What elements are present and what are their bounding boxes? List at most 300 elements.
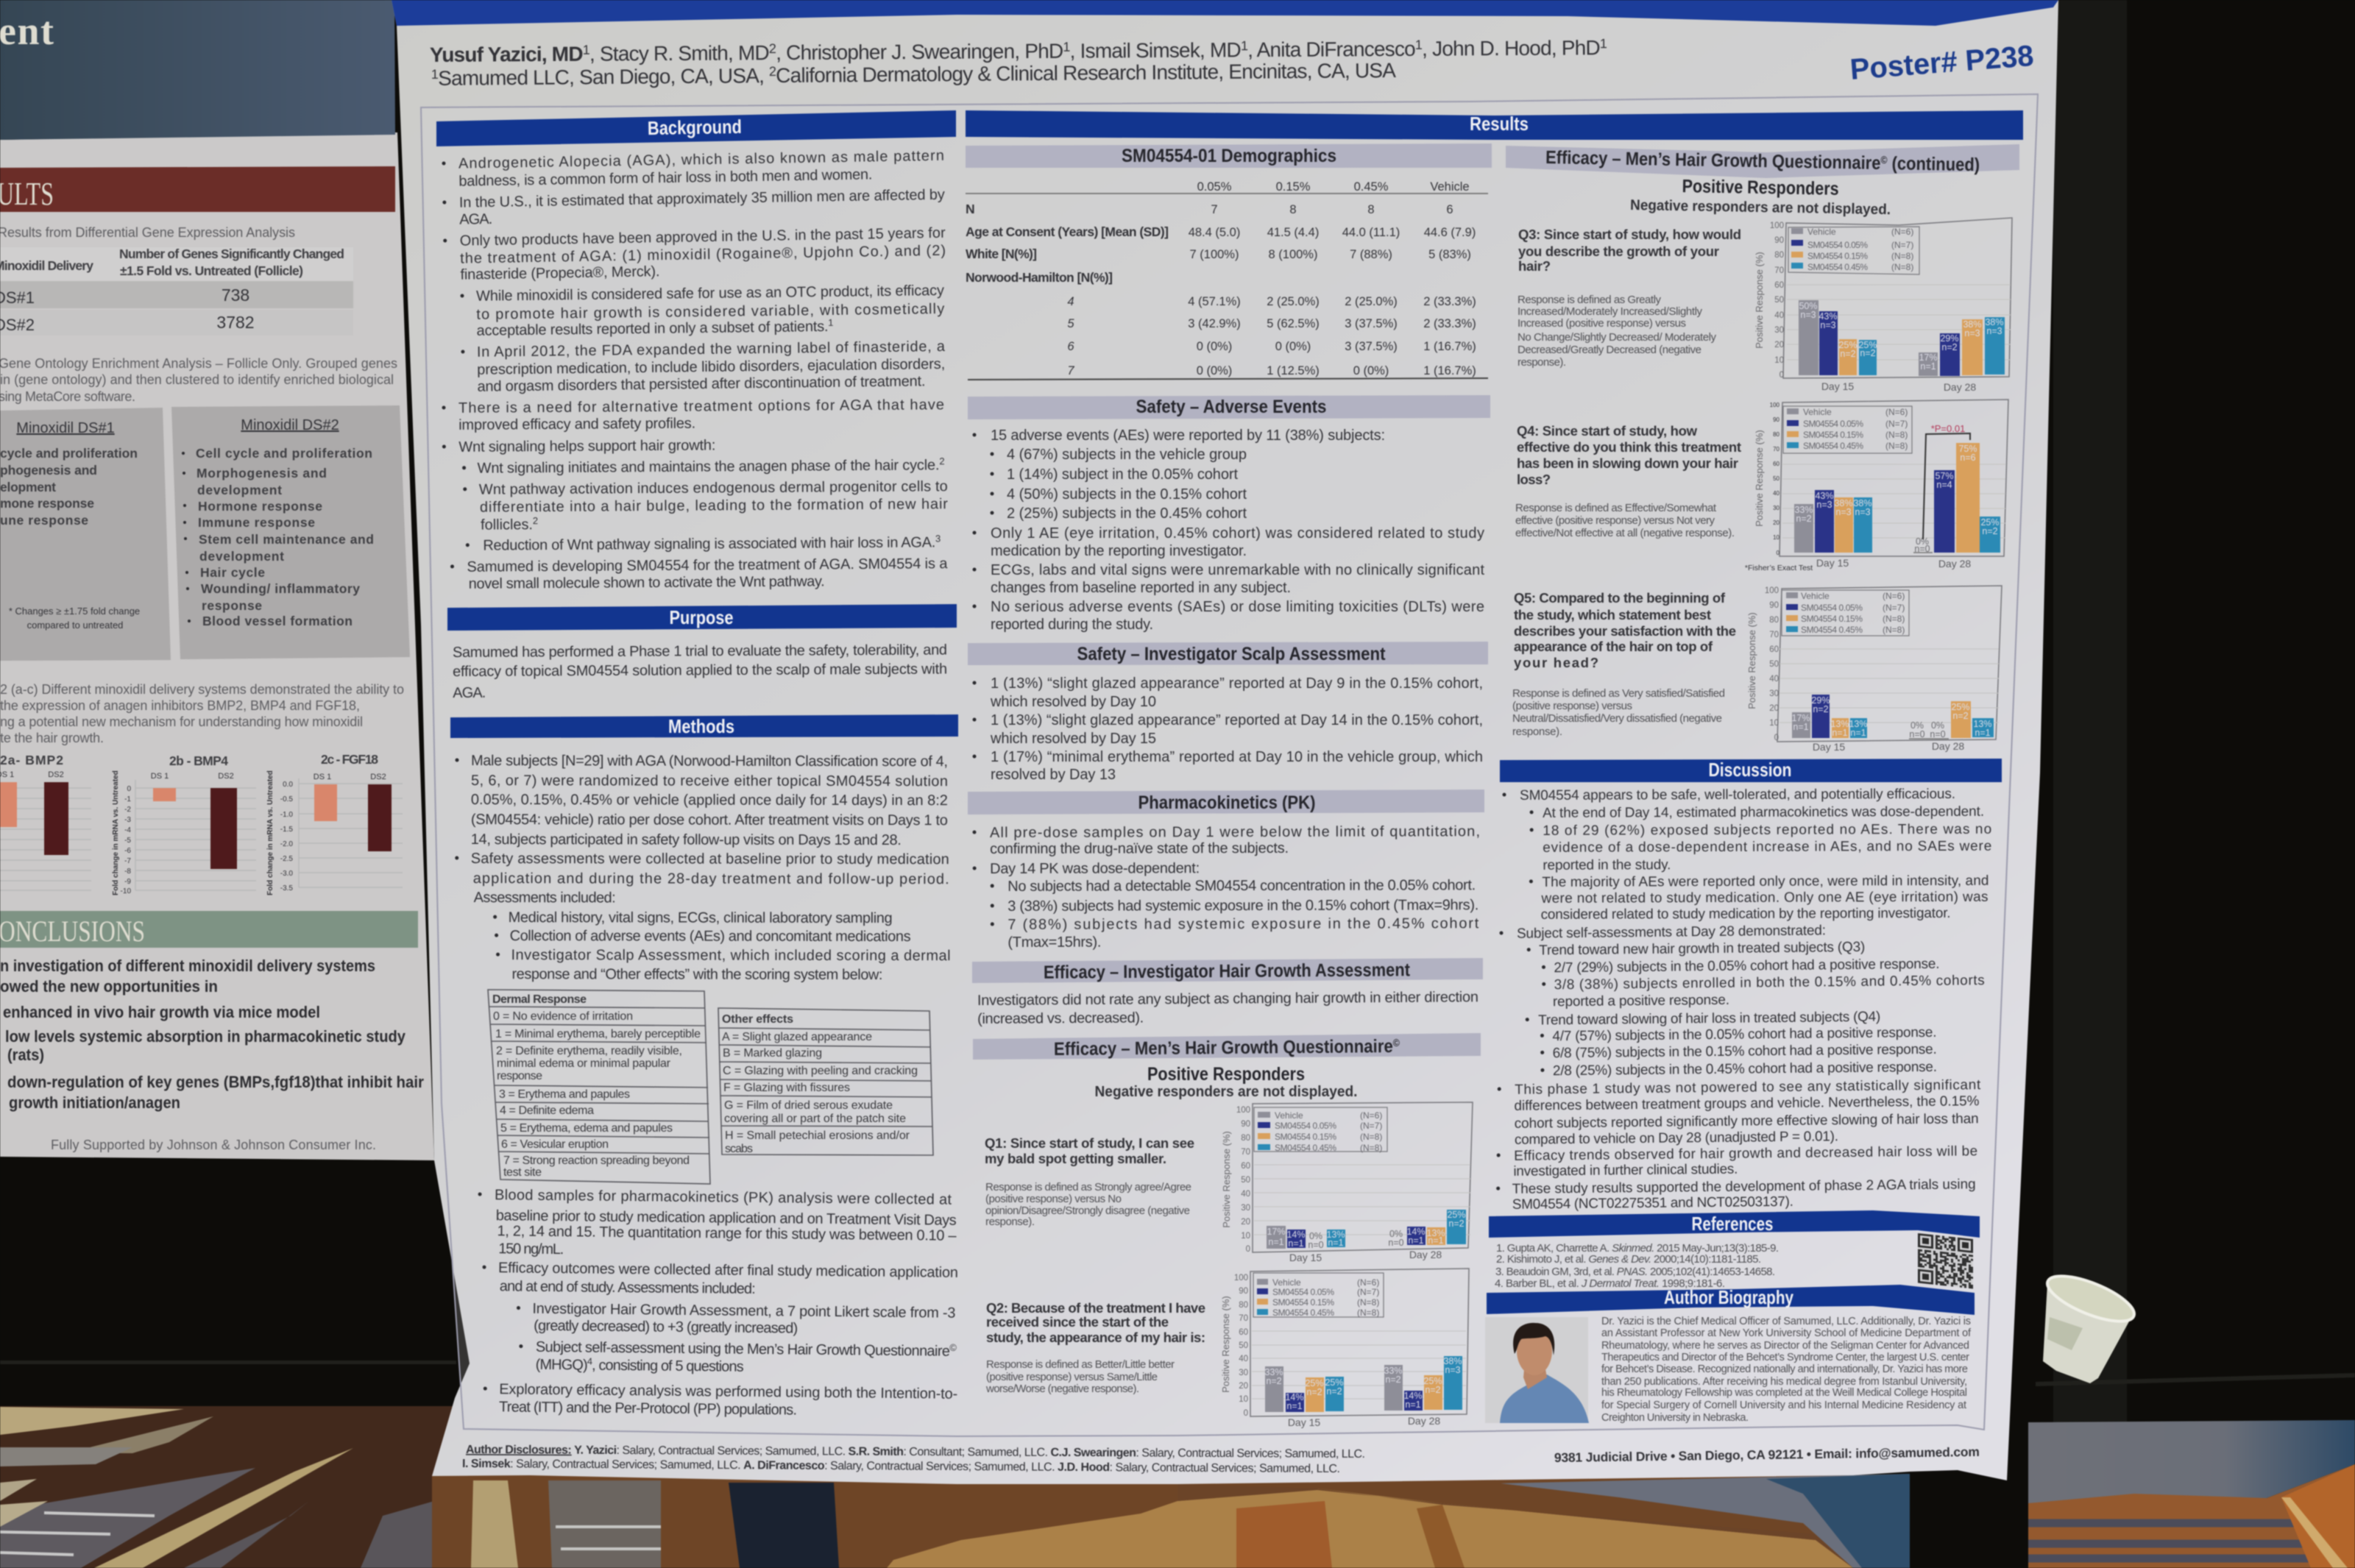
text: Background: While minoxidil is considered safe for use as an OTC product, its efficacy: [476, 283, 944, 305]
bar chart: 2c FGF18: -2.0: [280, 840, 293, 848]
table: demographics: 44.0 (11.1): [1342, 226, 1400, 239]
bar chart: Q5: n=0: [1909, 729, 1925, 739]
text: Background: finasteride (Propecia®, Merck).: [460, 263, 660, 283]
text: Background: the treatment of AGA: (1) minoxidil (Rogaine®, Upjohn Co.) and (2): [460, 243, 946, 267]
author list: 1: [1241, 38, 1248, 53]
text: Discussion: 6/8 (75%) subjects in the 0.15% cohort had a positive response.: [1553, 1042, 1937, 1061]
bar chart: Q4: 30: [1773, 505, 1780, 511]
bar chart: Q1: Positive Response (%): [1221, 1131, 1232, 1228]
text: Q1: Q1: Since start of study, I can see: [985, 1135, 1194, 1151]
text: Methods upper: Medical history, vital signs, ECGs, clinical laboratory sampling: [509, 909, 893, 926]
bar chart: Q5: n=2: [1813, 704, 1829, 714]
bar chart: 2c FGF18: DS2: [370, 773, 386, 781]
icon: QR code: [1918, 1233, 1973, 1289]
figure caption: [0, 682, 404, 745]
text: Q5: describes your satisfaction with the: [1514, 623, 1736, 639]
legend: (N=8): [1360, 1143, 1382, 1153]
bar chart: Q1: n=2: [1448, 1218, 1465, 1229]
bar chart: Q5: 13%: [1973, 719, 1992, 729]
affiliations: 2: [769, 64, 776, 79]
figure caption: te the hair growth.: [0, 731, 104, 745]
panel: Minoxidil DS#1: Minoxidil DS#1: [16, 420, 115, 436]
bar chart: Q4: 40: [1773, 490, 1780, 497]
bar chart: 2b BMP4: [112, 753, 256, 895]
text: Safety Investigator Scalp Assessment: resolved by Day 13: [991, 767, 1116, 783]
bar chart: Q4: 90: [1773, 416, 1780, 423]
bar chart: Q3: 70: [1774, 266, 1784, 275]
bar chart: Q2: 60: [1239, 1328, 1248, 1337]
text: Q2: (positive response) versus Same/Little: [986, 1371, 1158, 1383]
bar chart: 2c FGF18: 0.0: [283, 781, 293, 789]
text: Methods upper: Male subjects [N=29] with AGA (Norwood-Hamilton Classification score of 4,: [471, 753, 948, 770]
table: Dermal Response: 7 = Strong reaction spreading beyond: [503, 1154, 690, 1167]
panel: Minoxidil DS#2: response: [202, 598, 262, 613]
bar chart: Q4: 50: [1773, 475, 1780, 482]
text: Discussion: evidence of a dose-dependent increase in AEs, and no SAEs were: [1543, 839, 1991, 856]
heading: Efficacy continued: (continued): [1887, 153, 1980, 175]
legend: (N=6): [1885, 407, 1908, 417]
text: Safety Adverse Events: [974, 428, 1484, 633]
text: Methods lower: baseline prior to study medication application and on Treatment Visit Days: [496, 1207, 957, 1229]
text: Q5: (positive response) versus: [1512, 700, 1632, 712]
text: Safety Investigator Scalp Assessment: 1 (13%) “slight glazed appearance” reported at Day 9 in the 0.15% cohort,: [991, 675, 1483, 692]
table: demographics: [966, 180, 1488, 380]
bar chart: Q2: 14%: [1285, 1392, 1304, 1402]
text: Author Biography: an Assistant Professor at New York University School of Medicine Department of: [1601, 1327, 1972, 1339]
bar chart: 2c FGF18: -1.0: [280, 811, 293, 819]
text: Q5: appearance of the hair on top of: [1514, 639, 1713, 654]
table: demographics: 0 (0%): [1353, 364, 1389, 377]
bar chart: Q1: n=1: [1408, 1235, 1424, 1246]
bar chart: Q1: 13%: [1426, 1228, 1445, 1238]
table: Dermal Response: 6 = Vesicular eruption: [501, 1138, 609, 1151]
bar chart: Q2: 70: [1239, 1314, 1248, 1323]
legend: Vehicle: [1807, 227, 1836, 237]
table: Dermal Response: 2 = Definite erythema, readily visible,: [496, 1045, 682, 1057]
bar chart: Q3: n=2: [1860, 348, 1876, 358]
footer: author disclosures: [462, 1444, 1365, 1475]
table: demographics: 0.15%: [1276, 180, 1311, 194]
author list: , John D. Hood, PhD: [1422, 36, 1601, 60]
text: Methods lower: (MHGQ): [536, 1357, 588, 1374]
table: Dermal Response: 4 = Definite edema: [500, 1104, 594, 1117]
table: demographics: 0 (0%): [1275, 340, 1311, 353]
text: Background: AGA.: [459, 211, 492, 228]
bar chart: 2b BMP4: -10: [121, 887, 131, 895]
bar chart: Q2: 33%: [1264, 1367, 1283, 1377]
bar chart: Q4: 0: [1777, 550, 1780, 556]
text: Purpose: [453, 642, 947, 701]
bar chart: Q5: 100: [1765, 586, 1779, 595]
text: Q4: Response is defined as Effective/Somewhat: [1515, 502, 1717, 514]
bar chart: Q5: 30: [1769, 689, 1779, 698]
legend: SM04554 0.45%: [1807, 262, 1868, 272]
text: Pharmacokinetics: 3 (38%) subjects had systemic exposure in the 0.15% cohort (Tmax=9hrs).: [1007, 897, 1478, 915]
text: Author Biography: Creighton University in Nebraska.: [1601, 1412, 1749, 1424]
panel: Minoxidil DS#1: * Changes ≥ ±1.75 fold change: [9, 606, 140, 617]
text: Q4: effective (positive response) versus Not very: [1515, 514, 1715, 527]
bar chart: Q1: n=1: [1328, 1238, 1344, 1248]
text: Safety Adverse Events: No serious adverse events (SAEs) or dose limiting toxicities (DLTs) were: [991, 599, 1484, 615]
panel: main poster sheet: [392, 0, 2058, 1484]
bar chart: Q2: 33%: [1384, 1366, 1403, 1376]
legend: (N=7): [1883, 603, 1905, 613]
bar chart: Q4: 60: [1773, 461, 1780, 467]
gene expression table: [0, 225, 353, 336]
poster number: Poster# P238: [1849, 40, 2035, 86]
bar chart: Q4: 70: [1773, 446, 1780, 453]
text: Discussion: At the end of Day 14, estimated pharmacokinetics was dose-dependent.: [1543, 804, 1984, 821]
text: Q3: Q3: Since start of study, how would: [1518, 227, 1741, 242]
text: Q4: Q4: Since start of study, how: [1517, 423, 1698, 439]
table: demographics: 2 (25.0%): [1345, 295, 1398, 308]
subheading: positive responders continued: Positive Responders: [1682, 176, 1839, 199]
text: Methods lower: Subject self-assessment using the Men’s Hair Growth Questionnaire: [536, 1339, 950, 1360]
table: demographics: 4: [1067, 295, 1074, 308]
bar chart: Q4: Day 15: [1816, 557, 1849, 569]
text: Discussion: investigated in further clinical studies.: [1513, 1162, 1738, 1179]
table: demographics: 0 (0%): [1197, 340, 1232, 353]
table: Dermal Response: 1 = Minimal erythema, barely perceptible: [495, 1028, 701, 1040]
conclusions list: (rats): [7, 1046, 44, 1064]
text: Background: Wnt pathway activation induces endogenous dermal progenitor cells to: [479, 478, 948, 498]
legend: (N=7): [1360, 1121, 1382, 1131]
table: demographics: 1 (12.5%): [1267, 364, 1320, 377]
heading: Safety Investigator Scalp Assessment: Safety – Investigator Scalp Assessment: [1077, 644, 1386, 664]
bar chart: Q3: n=3: [1986, 326, 2002, 336]
text: Pharmacokinetics: Day 14 PK was dose-dependent:: [990, 860, 1200, 877]
gene expression table: Results from Differential Gene Expression Analysis: [0, 225, 295, 240]
bar chart: Q2: 0: [1244, 1409, 1248, 1418]
gene expression table: ±1.5 Fold vs. Untreated (Follicle): [120, 263, 303, 278]
text: Safety Investigator Scalp Assessment: 1 (17%) “minimal erythema” reported at Day 10 in the vehicle group, which: [991, 749, 1483, 765]
author list: 2: [769, 41, 776, 56]
text: Methods lower: 4: [587, 1356, 592, 1367]
subheading: positive responders: Negative responders are not displayed.: [1095, 1084, 1357, 1100]
bar chart: Q1: 17%: [1267, 1227, 1286, 1237]
bar chart: Q3: [1754, 218, 2012, 393]
text: Q2: [985, 1300, 1205, 1395]
legend: SM04554 0.45%: [1801, 625, 1863, 635]
text: Background: improved efficacy and safety profiles.: [458, 416, 695, 433]
sponsor note: Fully Supported by Johnson & Johnson Consumer Inc.: [51, 1138, 376, 1152]
text: Discussion: reported in the study.: [1543, 857, 1671, 873]
bar chart: Q2: n=2: [1326, 1386, 1342, 1397]
table: Other effects: F = Glazing with fissures: [723, 1082, 850, 1094]
table: demographics: 6: [1067, 340, 1074, 353]
text: Background: There is a need for alternative treatment options for AGA that have: [458, 397, 944, 416]
author list: 1: [1415, 38, 1423, 52]
text: Background: Wnt signaling helps support hair growth:: [458, 437, 715, 455]
top blue banner: [392, 0, 2058, 26]
text: Discussion: These study results supported the development of phase 2 AGA trials using: [1512, 1177, 1976, 1197]
panel: Minoxidil DS#1: phogenesis and: [0, 463, 97, 478]
text: Methods upper: [456, 753, 951, 983]
text: Safety Adverse Events: 1 (14%) subject in the 0.05% cohort: [1007, 467, 1238, 483]
affiliations: Samumed LLC, San Diego, CA, USA,: [438, 64, 770, 90]
text: References list: [1495, 1242, 1779, 1290]
panel: Minoxidil DS#1: cycle and proliferation: [0, 446, 138, 461]
significance bracket: *P=0.01: [1931, 423, 1965, 434]
panel: Minoxidil DS#2: Minoxidil DS#2: [241, 417, 339, 433]
panel: Minoxidil DS#2: Wounding/ inflammatory: [201, 581, 360, 596]
text: Q5: Response is defined as Very satisfied/Satisfied: [1512, 687, 1725, 700]
text: Q4: loss?: [1517, 472, 1551, 487]
text: Author Biography: for Behcet’s Disease. Recognized nationally and internationally, Dr. Yazici has more: [1601, 1363, 1968, 1375]
text: Methods lower: ©: [949, 1342, 957, 1353]
legend: (N=6): [1357, 1277, 1379, 1288]
bar chart: Q4: n=4: [1936, 480, 1952, 490]
bar chart: Q5: 29%: [1811, 695, 1830, 706]
bar chart: Q3: n=2: [1840, 349, 1856, 359]
bar chart: Q5: n=0: [1930, 729, 1946, 739]
subheading: positive responders continued: [1630, 176, 1891, 218]
bar chart: Q1: 40: [1241, 1190, 1250, 1199]
text: Background: to promote hair growth is considered variable, with cosmetically: [476, 301, 944, 323]
bar chart: 2b BMP4: -8: [124, 868, 131, 876]
bar chart: 2b BMP4: -1: [124, 795, 131, 803]
legend: SM04554 0.05%: [1275, 1121, 1336, 1131]
text: Q4: effective do you think this treatment: [1517, 439, 1741, 455]
table: demographics: 3 (37.5%): [1345, 317, 1398, 330]
bar chart: Q2: n=2: [1385, 1374, 1401, 1385]
table: demographics: 5 (83%): [1428, 248, 1471, 261]
bar chart: Q5: [1746, 586, 2002, 753]
text: References list: 1. Gupta AK, Charrette A. Skinmed. 2015 May-Jun;13(3):185-9.: [1496, 1242, 1779, 1255]
table: Dermal Response: minimal edema or minimal papular: [497, 1057, 671, 1070]
bar chart: Q1: n=0: [1388, 1238, 1404, 1248]
text: Methods lower: Investigator Hair Growth Assessment, a 7 point Likert scale from -3: [532, 1301, 956, 1322]
text: Efficacy Investigator: (increased vs. decreased).: [977, 1010, 1144, 1027]
text: Discussion: reported a positive response.: [1553, 993, 1729, 1010]
bar chart: Q2: 14%: [1403, 1391, 1423, 1401]
table: demographics: 0 (0%): [1197, 364, 1232, 377]
table: demographics: 7 (100%): [1190, 248, 1239, 261]
table: demographics: 0.05%: [1197, 180, 1232, 194]
bar chart: Q3: 38%: [1963, 319, 1982, 330]
table: Dermal Response: test site: [503, 1166, 542, 1179]
table: demographics: 1 (16.7%): [1423, 340, 1476, 353]
heading: Pharmacokinetics: Pharmacokinetics (PK): [1138, 792, 1316, 813]
gene expression table: 3782: [216, 313, 255, 332]
text: References list: 2. Kishimoto J, et al. Genes & Dev. 2000;14(10):1181-1185.: [1496, 1253, 1761, 1266]
bar chart: Q5: 13%: [1830, 719, 1849, 729]
text: References list: 3. Beaudoin GM, 3rd, et al. PNAS. 2005;102(41):14653-14658.: [1495, 1266, 1775, 1278]
bar chart: 2b BMP4: -5: [124, 837, 131, 845]
bar chart: Q3: 80: [1774, 251, 1784, 260]
bar chart: Q4: 75%: [1958, 444, 1977, 454]
bar chart: Q4: n=2: [1982, 526, 1998, 536]
text: Pharmacokinetics: All pre-dose samples on Day 1 were below the limit of quantitation,: [990, 823, 1480, 841]
left poster dark title band: ent: [0, 9, 54, 53]
text: Q3: No Change/Slightly Decreased/ Moderately: [1518, 331, 1716, 344]
heading: Safety Investigator Scalp Assessment: [968, 642, 1488, 665]
table: demographics: 3 (37.5%): [1345, 340, 1398, 353]
bar chart: Q1: n=1: [1428, 1235, 1444, 1246]
bar chart: Q3: 30: [1774, 326, 1784, 335]
left poster conclusions heading: ONCLUSIONS: [0, 915, 145, 948]
bar chart: Q4: 57%: [1935, 471, 1954, 481]
table: demographics: Norwood-Hamilton [N(%)]: [966, 270, 1113, 285]
text: Methods upper: Collection of adverse events (AEs) and concomitant medications: [510, 928, 911, 945]
table: demographics: 0.45%: [1354, 180, 1389, 194]
footer: address: 9381 Judicial Drive • San Diego, CA 92121 • Email: info@samumed.com: [1554, 1444, 1980, 1465]
text: Efficacy Investigator: Investigators did not rate any subject as changing hair growth in either direction: [977, 989, 1478, 1009]
legend: (N=8): [1357, 1308, 1379, 1318]
legend: (N=8): [1891, 251, 1913, 261]
text: Safety Adverse Events: Only 1 AE (eye irritation, 0.45% cohort) was considered related to study: [991, 525, 1484, 542]
bar chart: Q2: 50: [1239, 1341, 1248, 1350]
table: Other effects: [718, 1008, 933, 1155]
bar chart: 2b BMP4: -2: [124, 806, 131, 814]
bar chart: 2c FGF18: -3.0: [280, 870, 293, 878]
text: Background: [444, 148, 949, 592]
heading: Efficacy Mens Hair Growth Questionnaire: Efficacy – Men’s Hair Growth Questionnaire: [1054, 1036, 1436, 1060]
bar chart: Q5: 10: [1769, 719, 1779, 728]
bar chart: Q4: 10: [1773, 534, 1780, 541]
text: Discussion: 4/7 (57%) subjects in the 0.05% cohort had a positive response.: [1552, 1025, 1937, 1044]
bar chart: 2c FGF18: -3.5: [280, 884, 293, 893]
conclusions list: low levels systemic absorption in pharmacokinetic study: [5, 1027, 406, 1046]
legend: (N=6): [1891, 227, 1913, 237]
text: Methods upper: Investigator Scalp Assessment, which included scoring a dermal: [511, 947, 951, 964]
text: Background: In the U.S., it is estimated that approximately 35 million men are affected by: [459, 187, 945, 211]
bar chart: Q1: 14%: [1286, 1230, 1306, 1240]
heading: Author Biography: [1487, 1285, 1975, 1315]
bar chart: Q1: 20: [1241, 1218, 1250, 1227]
legend: (N=8): [1357, 1297, 1379, 1308]
bar chart: Q1: 25%: [1447, 1210, 1466, 1220]
bar chart: Q2: 80: [1239, 1301, 1248, 1310]
table: Other effects: A = Slight glazed appearance: [722, 1031, 872, 1043]
text: Safety Adverse Events: reported during the study.: [991, 617, 1153, 633]
bar chart: Q4: 33%: [1794, 505, 1813, 515]
legend: (N=7): [1891, 240, 1913, 250]
panel: Minoxidil DS#2: Blood vessel formation: [202, 614, 353, 628]
text: Q3: Increased (positive response) versus: [1518, 317, 1686, 330]
gene expression table: Number of Genes Significantly Changed: [119, 246, 344, 261]
heading: Efficacy continued: ©: [1880, 154, 1888, 166]
bar chart: Q3: 90: [1774, 236, 1784, 245]
figure caption: ng a potential new mechanism for understanding how minoxidil: [0, 714, 363, 729]
bar chart: Q3: Positive Response (%): [1754, 252, 1765, 349]
table: demographics: 5: [1067, 317, 1074, 330]
text: Q3: hair?: [1518, 258, 1551, 274]
text: Discussion: This phase 1 study was not powered to see any statistically significant: [1515, 1077, 1981, 1098]
bar chart: Q1: 10: [1241, 1232, 1250, 1241]
bar chart: Q4: n=3: [1835, 507, 1852, 517]
text: Q1: Response is defined as Strongly agree/Agree: [985, 1181, 1191, 1193]
table: Other effects: G = Film of dried serous exudate: [724, 1099, 893, 1112]
panel: Minoxidil DS#2: Hormone response: [198, 499, 322, 514]
bar chart: Q4: 20: [1773, 519, 1780, 526]
legend: SM04554 0.45%: [1272, 1308, 1334, 1318]
text: Background: acceptable results reported in only a subset of patients.: [476, 319, 829, 339]
text: Methods upper: 0.05%, 0.15%, 0.45% or vehicle (applied once daily for 14 days) in an 8:2: [471, 792, 948, 809]
panel: Minoxidil DS#1: compared to untreated: [27, 620, 123, 631]
bar chart: Q2: n=3: [1445, 1365, 1461, 1375]
bar chart: 2c FGF18: [266, 752, 403, 895]
heading: Efficacy Mens Hair Growth Questionnaire: [973, 1033, 1481, 1060]
bar chart: Q5: 80: [1769, 616, 1779, 625]
panel: Minoxidil DS#1: mone response: [0, 496, 94, 511]
legend: (N=8): [1883, 614, 1905, 624]
table: demographics: 7: [1067, 364, 1074, 377]
subheading: positive responders continued: Negative responders are not displayed.: [1630, 197, 1891, 218]
legend: SM04554 0.05%: [1272, 1287, 1334, 1297]
text: Q4: effective/Not effective at all (negative response).: [1515, 527, 1735, 539]
heading: Results: [966, 110, 2023, 140]
bar chart: Q5: 60: [1769, 645, 1779, 654]
subheading: positive responders: Positive Responders: [1147, 1064, 1305, 1085]
text: Background: 2: [533, 515, 538, 526]
text: Q2: Q2: Because of the treatment I have: [986, 1300, 1205, 1316]
text: Background: 3: [935, 533, 941, 544]
author list: , Anita DiFrancesco: [1247, 38, 1416, 61]
bar chart: 2b BMP4: -3: [124, 816, 131, 824]
heading: Efficacy continued: [1506, 144, 2019, 178]
left poster dark title band: [0, 0, 395, 140]
text: Methods upper: Assessments included:: [474, 890, 616, 906]
bar chart: Q3: n=2: [1941, 342, 1958, 352]
bar chart: Q1: 30: [1241, 1204, 1250, 1213]
bar chart: Q5: Day 15: [1813, 741, 1845, 753]
bar chart: Q1: [1221, 1102, 1473, 1263]
gene expression table: 738: [222, 285, 249, 305]
bar chart: Q3: 60: [1774, 281, 1784, 290]
bar chart: 2b BMP4: 0: [127, 785, 131, 793]
text: Background: Samumed is developing SM04554 for the treatment of AGA. SM04554 is a: [467, 556, 948, 575]
text: Discussion: [1495, 787, 1992, 1213]
text: Background: Only two products have been approved in the U.S. in the past 15 years for: [460, 225, 946, 249]
text: Discussion: 18 of 29 (62%) exposed subjects reported no AEs. There was no: [1543, 822, 1991, 839]
bar chart: Q4: n=0: [1914, 544, 1930, 554]
bar chart: Q2: Day 15: [1288, 1416, 1320, 1428]
table: demographics: 7 (88%): [1350, 248, 1392, 261]
heading: Methods: Methods: [668, 715, 734, 737]
text: Q2: worse/Worse (negative response).: [985, 1383, 1139, 1395]
bar chart: Q2: 20: [1239, 1382, 1248, 1391]
panel: Minoxidil DS#1: [0, 408, 171, 661]
text: Q3: Response is defined as Greatly: [1518, 294, 1662, 306]
text: Discussion: compared to vehicle on Day 28 (unadjusted P = 0.01).: [1515, 1129, 1838, 1148]
bar chart: Q3: 20: [1774, 341, 1784, 350]
legend: [1253, 1273, 1384, 1318]
table: Other effects: H = Small petechial erosions and/or: [725, 1129, 910, 1142]
legend: SM04554 0.05%: [1807, 240, 1868, 250]
bar chart: Q2: 100: [1234, 1274, 1248, 1283]
heading: References: [1489, 1210, 1980, 1238]
text: Author Biography: his Rheumatology Fellowship was completed at the Weill Medical College Hospital: [1601, 1387, 1967, 1399]
text: Background: Reduction of Wnt pathway signaling is associated with hair loss in AGA.: [483, 534, 935, 554]
bar chart: Q4: [1745, 400, 2008, 572]
bar chart: Q5: 50: [1769, 660, 1779, 669]
bar chart: Q5: n=1: [1793, 722, 1809, 732]
bar chart: 2a BMP2: 2a- BMP2: [0, 753, 63, 767]
panel: Minoxidil DS#1: elopment: [0, 480, 56, 494]
legend: Vehicle: [1801, 591, 1830, 601]
text: Q3: Decreased/Greatly Decreased (negative: [1518, 344, 1701, 356]
bar chart: Q1: 100: [1236, 1106, 1250, 1115]
text: Pharmacokinetics: (Tmax=15hrs).: [1007, 934, 1101, 951]
legend: SM04554 0.45%: [1275, 1143, 1336, 1153]
text: Discussion: SM04554 appears to be safe, well-tolerated, and potentially efficacious.: [1520, 787, 1955, 803]
text: Background: 2: [939, 455, 945, 467]
text: Pharmacokinetics: No subjects had a detectable SM04554 concentration in the 0.05% cohort.: [1007, 877, 1476, 895]
bar chart: Q2: 40: [1239, 1355, 1248, 1363]
table: demographics: 6: [1446, 203, 1453, 216]
bar chart: Q3: 10: [1774, 356, 1784, 365]
